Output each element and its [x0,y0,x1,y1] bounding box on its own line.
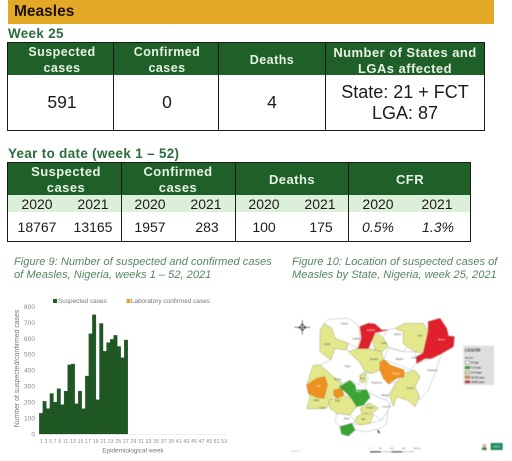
values row: 283 [195,219,219,235]
header: deaths: Deaths [250,53,294,67]
legend: map: 1-1 Case [471,367,481,370]
bar chart: suspected and confirmed cases by week [14,298,227,454]
y axis title: Number of suspected/confirmed cases [14,309,21,427]
years row: 2021 [421,196,453,212]
yellow states: 2 to 9 cases [307,323,428,425]
header: suspected cases: Suspected [28,45,96,59]
state name labels: FCT [360,377,365,380]
values row: 18767 [18,219,56,235]
value: states and LGA counts [341,82,469,123]
title bar: Measles [8,0,494,24]
header: confirmed cases [134,45,200,74]
y axis labels: 300 [24,384,35,390]
legend: chart series [53,298,210,305]
y axis labels: 0 [31,432,35,438]
years row: 2021 [190,196,222,212]
header: deaths: Deaths [269,172,315,187]
table header band [8,42,484,75]
header: suspected cases: cases [43,60,81,74]
header: number of states and LGAs affected: LGAs affected [358,60,452,76]
values row: 0.5% [362,219,394,235]
Niger delta coast mark [377,429,380,434]
header: confirmed cases: Confirmed [143,164,213,179]
header: suspected cases [31,164,101,194]
value: states and LGA counts: State: 21 + FCT [341,82,469,102]
y axis labels: 700 [24,320,35,327]
years row: 2020 [134,196,166,212]
years row: 2020 [362,196,394,212]
years row: 2020 [248,196,280,212]
state name labels: Ogun [313,399,320,402]
y axis labels: 500 [24,352,35,358]
y axis labels [24,304,35,438]
value: 591 suspected: 591 [47,92,77,112]
header: number of states and LGAs affected: Number of States and [333,45,477,60]
caption: figure 10 [292,256,498,281]
header: suspected cases: Suspected [31,164,101,179]
values row: 1.3% [422,219,454,235]
y axis labels: 200 [24,400,35,406]
state name labels: Niger [345,365,351,368]
caption: figure 9: of Measles, Nigeria, weeks 1 – 52, 2021 [14,269,211,281]
state name labels: Zamfara [352,337,362,340]
legend: map: 0 Case [471,362,479,365]
caption: figure 10: Figure 10: Location of suspected cases of [292,256,497,268]
state name labels: Kaduna [370,358,379,361]
state name labels: Benue [382,394,389,397]
logo: NCDC: NCDC [493,447,500,449]
scale bar: 0 [369,447,371,450]
red states: 20 to 89 cases [358,318,454,363]
state name labels: Taraba [406,387,414,390]
state name labels: Adamawa [427,369,439,372]
logo: coat of arms [482,444,487,450]
values row: 175 [309,219,333,235]
states of Nigeria [307,318,454,436]
scale bar [369,447,421,452]
state name labels: Kebbi [324,343,331,346]
x axis title: Epidemiological week [102,448,165,454]
legend: map: 20-89 Cases [471,381,484,384]
header: CFR: CFR [396,172,424,187]
legend: map [463,346,494,385]
green states: 1 case [339,381,370,436]
state name labels: Yobe [417,335,424,338]
logo: NCDC [491,443,503,450]
bars: suspected cases weeks 1 to 25 [39,315,128,434]
value: states and LGA counts: LGA: 87 [372,103,438,123]
compass icon [294,320,310,335]
caption: figure 10: Measles by State, Nigeria, week 25, 2021 [292,269,497,281]
state name labels: Imo [361,418,366,421]
header: confirmed cases: cases [159,180,197,194]
state name labels: Enugu [367,406,374,409]
scale bar: 340 km [413,447,421,450]
legend: chart series: Laboratory confirmed cases [131,298,210,305]
state name labels: Katsina [367,329,376,332]
state name labels: Kano [381,342,388,345]
footnote: map date: Week 25 [292,450,301,453]
years row: 2021 [304,196,336,212]
header: number of states and LGAs affected [333,45,477,76]
values row: 13165 [74,219,112,235]
header: confirmed cases: cases [148,60,186,74]
scale bar: 240 [402,447,406,450]
caption: figure 9: Figure 9: Number of suspected and confirmed cases [14,256,272,268]
legend: map: Measles [465,357,473,360]
y axis labels: 100 [24,416,35,422]
state name labels: Bauchi [396,358,403,361]
state name labels [313,322,446,421]
header: suspected cases: cases [47,180,85,194]
title bar: Measles: Measles [14,3,74,20]
state name labels: Delta [344,417,350,420]
legend: map: LEGEND [465,349,481,353]
table: year to date [7,162,471,242]
state name labels: Gombe [411,356,420,359]
state name labels: Nasarawa [371,381,383,384]
heading: Week 25: Week 25 [8,26,64,41]
white states: 0 cases [320,318,442,432]
state name labels: Cross R. [382,405,392,408]
values row: 1957 [134,219,166,235]
values row [18,219,454,235]
state name labels: Ekiti [335,400,341,403]
state name labels: Kogi [356,390,361,393]
state name labels: Borno [438,338,446,341]
state name labels: Plateau [392,372,401,375]
header: confirmed cases [143,164,213,194]
caption: figure 9 [14,256,272,281]
header: confirmed cases: Confirmed [134,45,200,59]
x axis labels: 1 3 5 7 9 11 13 15 17 19 21 23 25 27 29 31 33 35 37 39 41 43 45 47 49 51 53 [40,439,227,445]
y axis labels: 400 [24,368,35,374]
orange states: 10 to 19 cases [307,360,404,398]
legend: map: 2-9 Cases [471,372,482,375]
header: suspected cases [28,45,96,74]
scale bar: 160 [390,447,394,450]
state name labels: Sokoto [341,322,349,325]
state name labels: Lagos [319,406,326,409]
year row band [7,195,471,212]
table: week 25 [7,42,485,131]
x axis line [39,434,226,436]
heading: year to date: Year to date (week 1 – 52) [8,146,179,161]
legend: chart series: Suspected cases [58,298,107,305]
map: suspected cases by state [292,318,504,454]
state name labels: Kwara [334,378,342,381]
years row: 2021 [77,196,109,212]
state name labels: Oyo [317,385,322,388]
y axis labels: 600 [24,336,35,343]
header band [7,162,471,195]
values row: 100 [252,219,276,235]
value: 4 deaths: 4 [267,92,277,112]
y axis labels: 800 [24,304,35,311]
value: 0 confirmed: 0 [162,92,172,112]
years row: 2020 [21,196,53,212]
state name labels: Jigawa [394,333,402,336]
legend: map: 10-19 Cases [471,376,484,379]
years row [21,196,453,212]
scale bar: 80 [379,447,382,450]
